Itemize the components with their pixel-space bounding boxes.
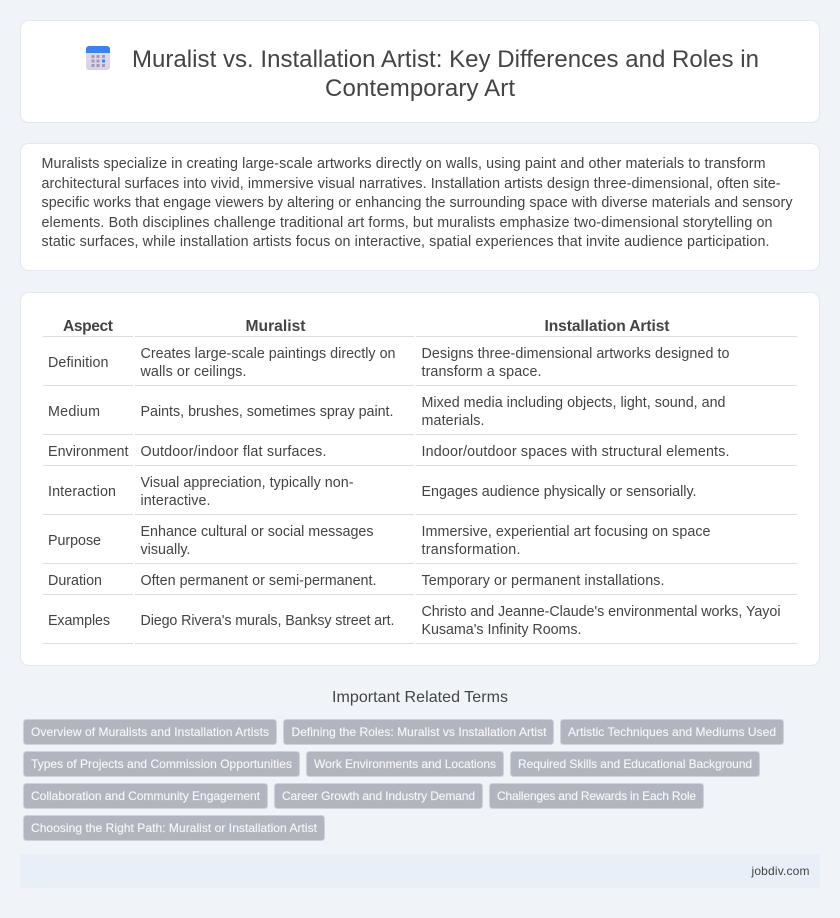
row: interaction: interactive.: [140, 493, 210, 509]
row: purpose: [48, 524, 711, 558]
row: duration: Often permanent or semi-permanent.: [140, 573, 376, 589]
title: Contemporary Art: [325, 75, 515, 102]
row: interaction: Visual appreciation, typically non-: [140, 475, 354, 491]
table header: Aspect: [63, 318, 113, 335]
text block: introduction paragraph: architectural surfaces into vivid, immersive visual narratives. Installation artists design three-dimensional, often site-: [42, 176, 781, 192]
row: examples: [48, 604, 780, 638]
heading: related terms: Important Related Terms: [332, 689, 508, 706]
text block: introduction paragraph: specific works that engage viewers by altering or enhancing the surrounding space with diverse materials and sensory: [42, 195, 793, 211]
row: purpose: Enhance cultural or social messages: [140, 524, 374, 540]
footer: [20, 854, 820, 888]
row: examples: Kusama's Infinity Rooms.: [422, 622, 582, 638]
row: environment: [48, 444, 730, 460]
table header: Muralist: [246, 318, 306, 335]
title: [132, 46, 759, 102]
footer: jobdiv.com: [750, 864, 810, 878]
tags: related terms: [24, 720, 784, 840]
tags: related terms: Choosing the Right Path: Muralist or Installation Artist: [31, 821, 318, 835]
row: purpose: visually.: [140, 542, 190, 558]
row: purpose: transformation.: [422, 542, 520, 558]
row: examples: Examples: [48, 613, 110, 629]
row: definition: Definition: [48, 355, 109, 371]
row: interaction: Interaction: [48, 484, 116, 500]
row: definition: transform a space.: [422, 364, 542, 380]
row: medium: Mixed media including objects, light, sound, and: [422, 395, 726, 411]
row: definition: [48, 346, 730, 380]
text block: introduction paragraph: static surfaces, while installation artists focus on interactive, spatial experiences that invite audience participation.: [42, 234, 770, 250]
row: purpose: Immersive, experiential art focusing on space: [422, 524, 711, 540]
row: duration: Temporary or permanent installations.: [422, 573, 664, 589]
row: interaction: [48, 475, 696, 509]
text block: introduction paragraph: elements. Both disciplines challenge traditional art forms, but muralists emphasize two-dimensional storytelling on: [42, 215, 773, 231]
tags: related terms: Types of Projects and Commission Opportunities: [31, 757, 292, 771]
row: definition: Designs three-dimensional artworks designed to: [422, 346, 730, 362]
icon: calendar: [86, 46, 110, 70]
row: medium: materials.: [422, 413, 484, 429]
text block: introduction paragraph: [42, 156, 793, 250]
row: medium: Medium: [48, 404, 100, 420]
row: duration: Duration: [48, 573, 102, 589]
row: environment: Indoor/outdoor spaces with structural elements.: [422, 444, 730, 460]
table header: [63, 318, 670, 335]
row: interaction: Engages audience physically or sensorially.: [422, 484, 696, 500]
table header: Installation Artist: [544, 318, 670, 335]
row: environment: Outdoor/indoor flat surfaces.: [140, 444, 326, 460]
row: duration: [48, 573, 664, 589]
tags: related terms: Overview of Muralists and Installation Artists: [31, 725, 269, 739]
row: definition: Creates large-scale paintings directly on: [140, 346, 396, 362]
tags: related terms: Challenges and Rewards in Each Role: [497, 789, 696, 803]
tags: related terms: Required Skills and Educational Background: [518, 757, 752, 771]
tags: related terms: Career Growth and Industry Demand: [282, 789, 475, 803]
text block: introduction paragraph: Muralists specialize in creating large-scale artworks directly on walls, using paint and other materials to transform: [42, 156, 766, 172]
title: Muralist vs. Installation Artist: Key Differences and Roles in: [132, 46, 759, 73]
row: medium: [48, 395, 726, 429]
tags: related terms: Collaboration and Community Engagement: [31, 789, 261, 803]
row: examples: Diego Rivera's murals, Banksy street art.: [140, 613, 394, 629]
row: medium: Paints, brushes, sometimes spray paint.: [140, 404, 394, 420]
tags: related terms: Defining the Roles: Muralist vs Installation Artist: [292, 725, 547, 739]
tags: related terms: Artistic Techniques and Mediums Used: [568, 725, 776, 739]
panel: header: [20, 20, 820, 122]
tags: related terms: Work Environments and Locations: [314, 757, 496, 771]
row: examples: Christo and Jeanne-Claude's environmental works, Yayoi: [422, 604, 780, 620]
row: purpose: Purpose: [48, 533, 101, 549]
row: environment: Environment: [48, 444, 129, 460]
panel: introduction: [20, 144, 820, 270]
panel: comparison table: [20, 292, 820, 666]
row: definition: walls or ceilings.: [140, 364, 246, 380]
